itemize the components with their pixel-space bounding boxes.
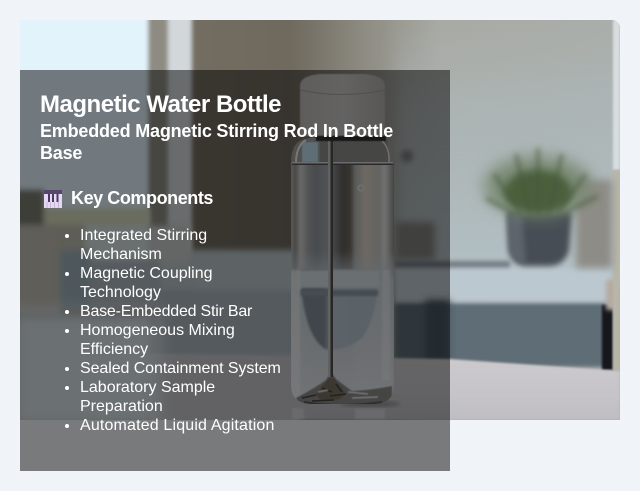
subtitle [40, 121, 393, 163]
left room: sill, shelves and lower wall [10, 190, 300, 360]
bottle cap [300, 74, 385, 136]
title: Magnetic Water Bottle [40, 91, 281, 118]
list: key components: Preparation [80, 398, 163, 415]
small bubble [358, 185, 364, 191]
list: key components: Laboratory Sample [80, 379, 215, 396]
table [150, 354, 620, 420]
list: key components: Homogeneous Mixing [80, 322, 235, 339]
bottle [290, 74, 400, 419]
subtitle: Base [40, 143, 82, 163]
bottle glass body [290, 137, 396, 407]
subtitle: Embedded Magnetic Stirring Rod In Bottle [40, 121, 393, 141]
lower glass [290, 250, 395, 405]
icon: piano keyboard [44, 190, 62, 208]
bottle shadow and reflection [340, 402, 400, 406]
window [20, 20, 195, 252]
heading: key components: Key Components [71, 188, 213, 208]
inner capsule [300, 270, 379, 350]
list: key components: Magnetic Coupling [80, 265, 213, 282]
plant pot [484, 148, 612, 268]
panel: translucent content overlay [20, 70, 450, 471]
list: key components: Integrated Stirring [80, 227, 207, 244]
list: key components: Technology [80, 284, 161, 301]
photo: glass bottle on kitchen counter [20, 20, 620, 420]
right edge strip [613, 20, 620, 170]
wall [20, 20, 620, 420]
list: key components: Efficiency [80, 341, 148, 358]
shoulder dark area [291, 137, 396, 163]
edge highlights [291, 270, 300, 366]
list: key components [65, 227, 281, 434]
list: key components: Sealed Containment System [80, 360, 281, 377]
back counter and cabinet [395, 261, 610, 367]
stir base mound [296, 372, 392, 405]
list: key components: Base-Embedded Stir Bar [80, 303, 252, 320]
stirring rod [328, 137, 330, 377]
left bottle-side spot and back wall shadow [401, 150, 413, 162]
list: key components: Automated Liquid Agitation [80, 417, 275, 434]
cabinet dark end [602, 305, 613, 370]
plant leaves [484, 156, 592, 216]
list: key components: Mechanism [80, 246, 162, 263]
